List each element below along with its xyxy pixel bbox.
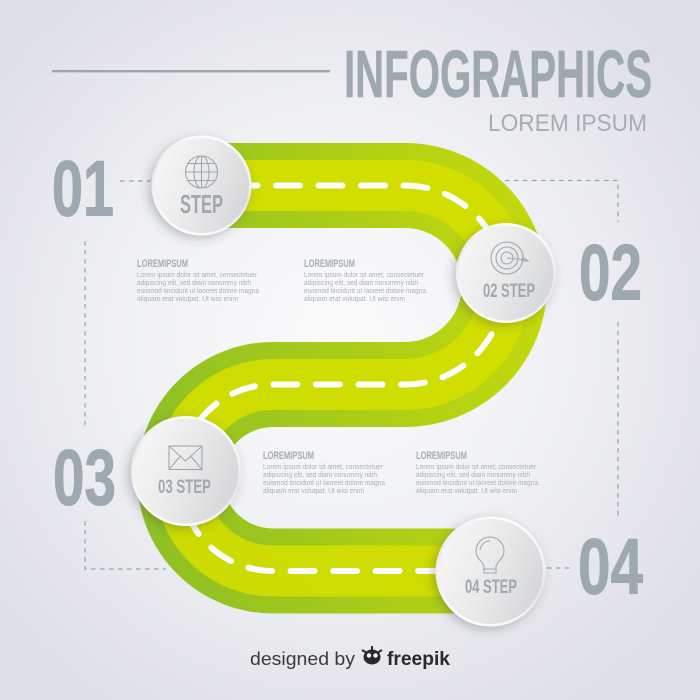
- text block 1: Lorem ipsum dolor sit amet, consectetuer: [137, 270, 258, 279]
- text block 2: aliquam erat volutpat. Ut wisi enim: [304, 294, 405, 303]
- step 3 label: 03 STEP: [158, 477, 211, 498]
- text block 3: adipiscing elit, sed diam nonummy nibh: [263, 470, 377, 479]
- icon: globe: [186, 156, 218, 188]
- text block 1: [137, 258, 260, 303]
- text block 2: adipiscing elit, sed diam nonummy nibh: [304, 278, 418, 287]
- subtitle: LOREM IPSUM: [488, 110, 647, 137]
- text block 1: LOREMIPSUM: [137, 258, 188, 270]
- number 02: 02: [579, 228, 642, 316]
- step 2 label: 02 STEP: [483, 281, 535, 302]
- text block 3: LOREMIPSUM: [263, 450, 314, 462]
- text block 4: Lorem ipsum dolor sit amet, consectetuer: [416, 462, 537, 471]
- road outer band: [180, 186, 504, 571]
- credit text: designed by: [250, 649, 355, 669]
- number 03: 03: [53, 432, 116, 522]
- text block 3: aliquam erat volutpat. Ut wisi enim: [263, 486, 364, 495]
- title rule: [52, 70, 330, 72]
- text block 4: [416, 450, 539, 495]
- text block 4: LOREMIPSUM: [416, 450, 467, 462]
- winding road: [180, 186, 504, 571]
- text block 1: aliquam erat volutpat. Ut wisi enim: [137, 294, 238, 303]
- text block 2: [304, 258, 427, 303]
- step 2 disc: [456, 223, 556, 323]
- icon: freepik logo: [362, 646, 382, 664]
- text block 4: euismod tincidunt ut laoreet dolore magna: [416, 478, 539, 487]
- icon: light bulb: [476, 537, 504, 573]
- text block 1: adipiscing elit, sed diam nonummy nibh: [137, 278, 251, 287]
- text block 4: aliquam erat volutpat. Ut wisi enim: [416, 486, 517, 495]
- step 1 disc: [152, 136, 252, 236]
- icon: envelope: [169, 446, 202, 470]
- number 01: 01: [52, 144, 114, 232]
- road centre dashes: [180, 186, 504, 571]
- text block 2: euismod tincidunt ut laoreet dolore magna: [304, 286, 427, 295]
- text block 1: euismod tincidunt ut laoreet dolore magna: [137, 286, 260, 295]
- text block 3: euismod tincidunt ut laoreet dolore magna: [263, 478, 386, 487]
- icon: target: [491, 242, 528, 274]
- step 3 disc: [131, 416, 241, 526]
- text block 2: LOREMIPSUM: [304, 258, 355, 270]
- road inner band: [180, 186, 504, 571]
- text block 3: Lorem ipsum dolor sit amet, consectetuer: [263, 462, 384, 471]
- credit: [250, 646, 450, 670]
- text block 4: adipiscing elit, sed diam nonummy nibh: [416, 470, 530, 479]
- text block 3: [263, 450, 386, 495]
- step 4 disc: [436, 516, 546, 626]
- freepik wordmark: freepik: [387, 649, 450, 670]
- text block 2: Lorem ipsum dolor sit amet, consectetuer: [304, 270, 425, 279]
- number 04: 04: [578, 522, 643, 610]
- step 4 label: 04 STEP: [465, 577, 517, 598]
- dashed connectors: [85, 180, 618, 569]
- step 1 label: STEP: [180, 189, 223, 219]
